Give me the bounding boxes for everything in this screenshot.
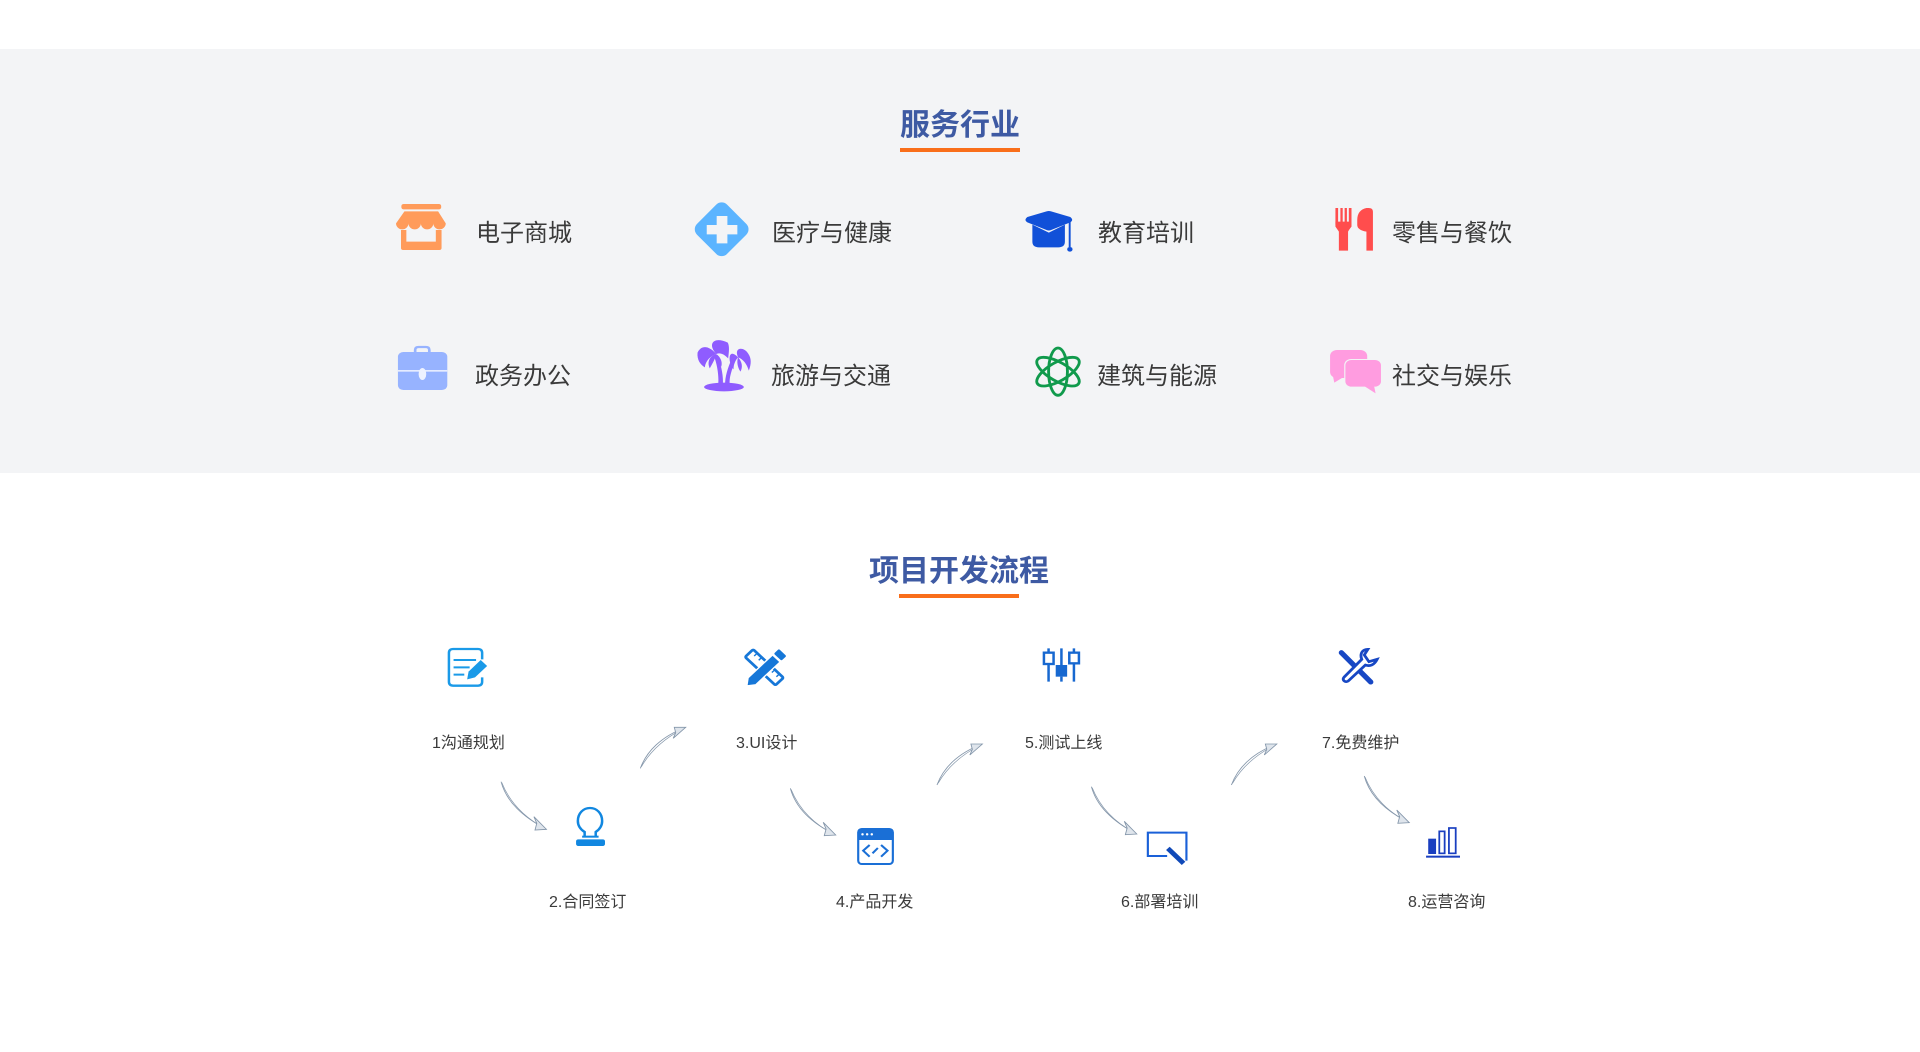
heading: service industries: 服务行业 <box>900 109 1020 142</box>
arrow: step 1 to 2 <box>501 782 546 830</box>
arrow: step 5 to 6 <box>1091 787 1137 835</box>
label: step 1: 1沟通规划 <box>432 734 505 752</box>
arrow: step 4 to 5 <box>937 744 982 785</box>
arrow: step 3 to 4 <box>790 788 836 836</box>
label: step 4: 4.产品开发 <box>836 893 913 911</box>
label: step 5: 5.测试上线 <box>1025 734 1102 752</box>
label: education: 教育培训 <box>1098 220 1194 247</box>
icon: medical cross <box>692 199 752 259</box>
arrow: step 7 to 8 <box>1364 776 1409 823</box>
label: step 2: 2.合同签订 <box>549 893 626 911</box>
icon: fork and knife <box>1335 208 1373 251</box>
icon: wrench and screwdriver <box>1341 649 1377 682</box>
label: step 6: 6.部署培训 <box>1121 893 1198 911</box>
icon: store <box>396 204 446 250</box>
label: step 3: 3.UI设计 <box>736 734 797 752</box>
label: healthcare: 医疗与健康 <box>772 220 892 247</box>
label: social and entertainment: 社交与娱乐 <box>1392 363 1512 390</box>
icon: ruler and pencil <box>743 649 786 690</box>
icon: briefcase <box>398 347 447 390</box>
arrow: step 6 to 7 <box>1231 744 1277 785</box>
icon: atom <box>1033 348 1083 395</box>
icon: bar chart <box>1426 828 1460 858</box>
icon: screen with pointer <box>1148 833 1186 863</box>
label: retail and dining: 零售与餐饮 <box>1392 220 1512 247</box>
icon: sliders <box>1044 648 1079 682</box>
icon: notes with pencil <box>449 649 487 686</box>
label: e-commerce: 电子商城 <box>476 220 572 247</box>
icon: palm trees <box>697 340 751 391</box>
label: government office: 政务办公 <box>475 363 571 390</box>
icon: graduation cap <box>1025 211 1073 252</box>
heading: project development process: 项目开发流程 <box>869 555 1049 588</box>
label: travel and transport: 旅游与交通 <box>771 363 891 390</box>
icon: chat bubbles <box>1330 350 1382 393</box>
label: step 8: 8.运营咨询 <box>1408 893 1485 911</box>
label: construction and energy: 建筑与能源 <box>1097 363 1217 390</box>
arrow: step 2 to 3 <box>640 727 686 768</box>
label: step 7: 7.免费维护 <box>1322 734 1399 752</box>
icon: code window <box>857 828 894 864</box>
panel: service industries background <box>0 49 1920 473</box>
icon: stamp <box>576 808 605 846</box>
